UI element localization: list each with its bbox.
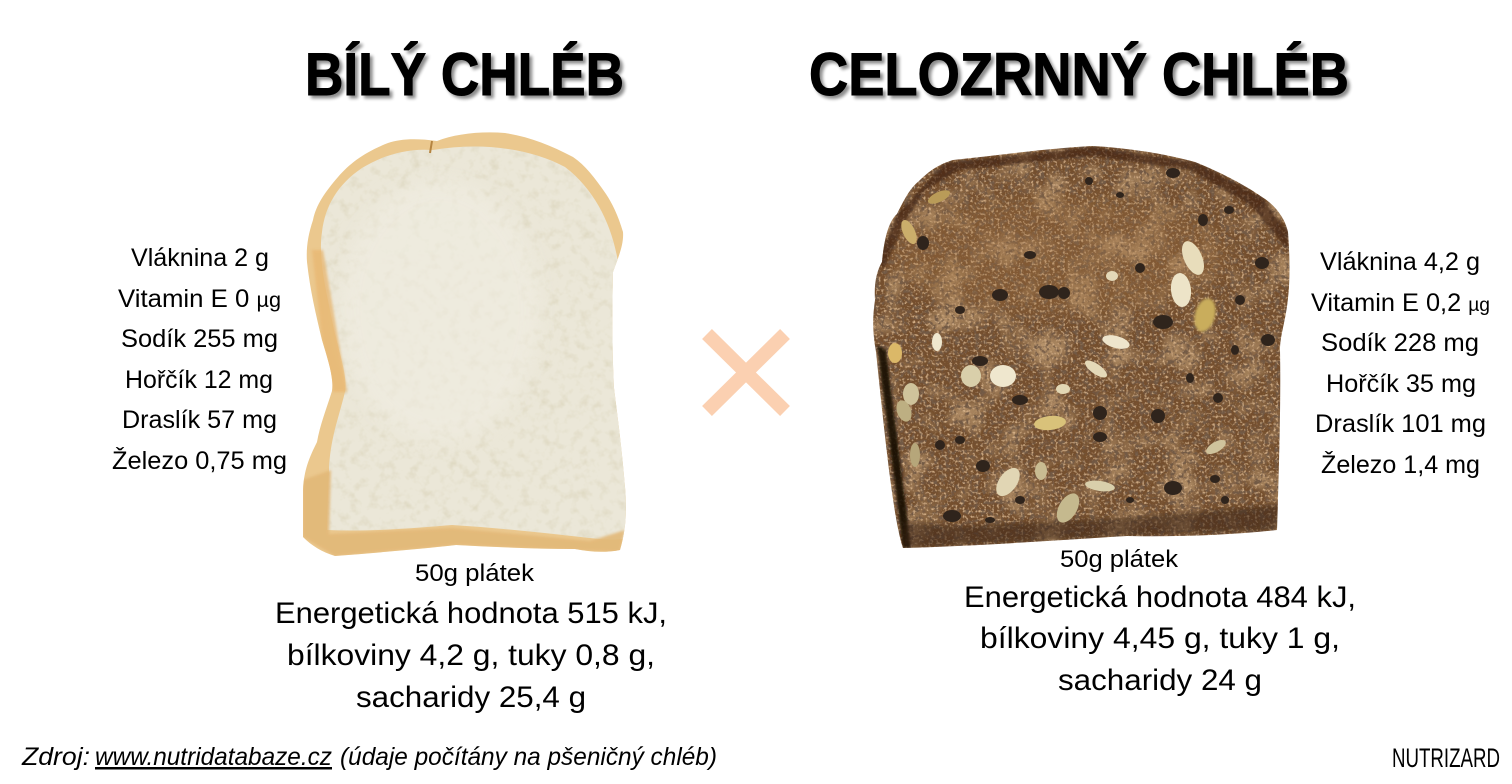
right nutrient list: Sodík 228 mg [1321,329,1479,357]
title: wholegrain bread: CELOZRNNÝ CHLÉB [809,41,1349,108]
left nutrient list: Vitamin E 0 µg [118,285,281,313]
energy text right: sacharidy 24 g [1058,664,1262,697]
source line [21,743,717,771]
left nutrient list: Sodík 255 mg [121,325,278,353]
image: white bread slice [295,125,635,565]
energy text left: sacharidy 25,4 g [356,681,586,714]
right nutrient list: Draslík 101 mg [1315,410,1486,438]
right nutrient list: Vitamin E 0,2 µg [1311,289,1490,317]
seeds [888,187,1228,526]
source line: (údaje počítány na pšeničný chléb) [340,743,717,771]
multiplication sign [707,334,785,411]
right nutrient list: Hořčík 35 mg [1326,370,1476,398]
energy text right: bílkoviny 4,45 g, tuky 1 g, [980,622,1340,655]
title: white bread: BÍLÝ CHLÉB [305,41,624,108]
dark grains [917,168,1275,523]
source line: www.nutridatabaze.cz [95,743,332,771]
energy text left: Energetická hodnota 515 kJ, [275,597,667,630]
source line: Zdroj: [21,743,90,771]
right nutrient list [1311,248,1490,479]
left nutrient list: Železo 0,75 mg [112,446,287,475]
left nutrient list: Draslík 57 mg [122,406,277,434]
serving label left: 50g plátek [415,560,535,587]
right nutrient list: Vláknina 4,2 g [1320,248,1480,276]
image: wholegrain bread slice [865,140,1295,555]
left nutrient list [112,244,287,475]
left nutrient list: Hořčík 12 mg [125,366,273,394]
left nutrient list: Vláknina 2 g [131,244,269,272]
energy text left: bílkoviny 4,2 g, tuky 0,8 g, [287,639,655,672]
serving label right: 50g plátek [1060,546,1179,573]
energy text right: Energetická hodnota 484 kJ, [964,581,1356,614]
energy text right [964,581,1356,697]
right nutrient list: Železo 1,4 mg [1321,450,1480,479]
energy text left [275,597,667,714]
